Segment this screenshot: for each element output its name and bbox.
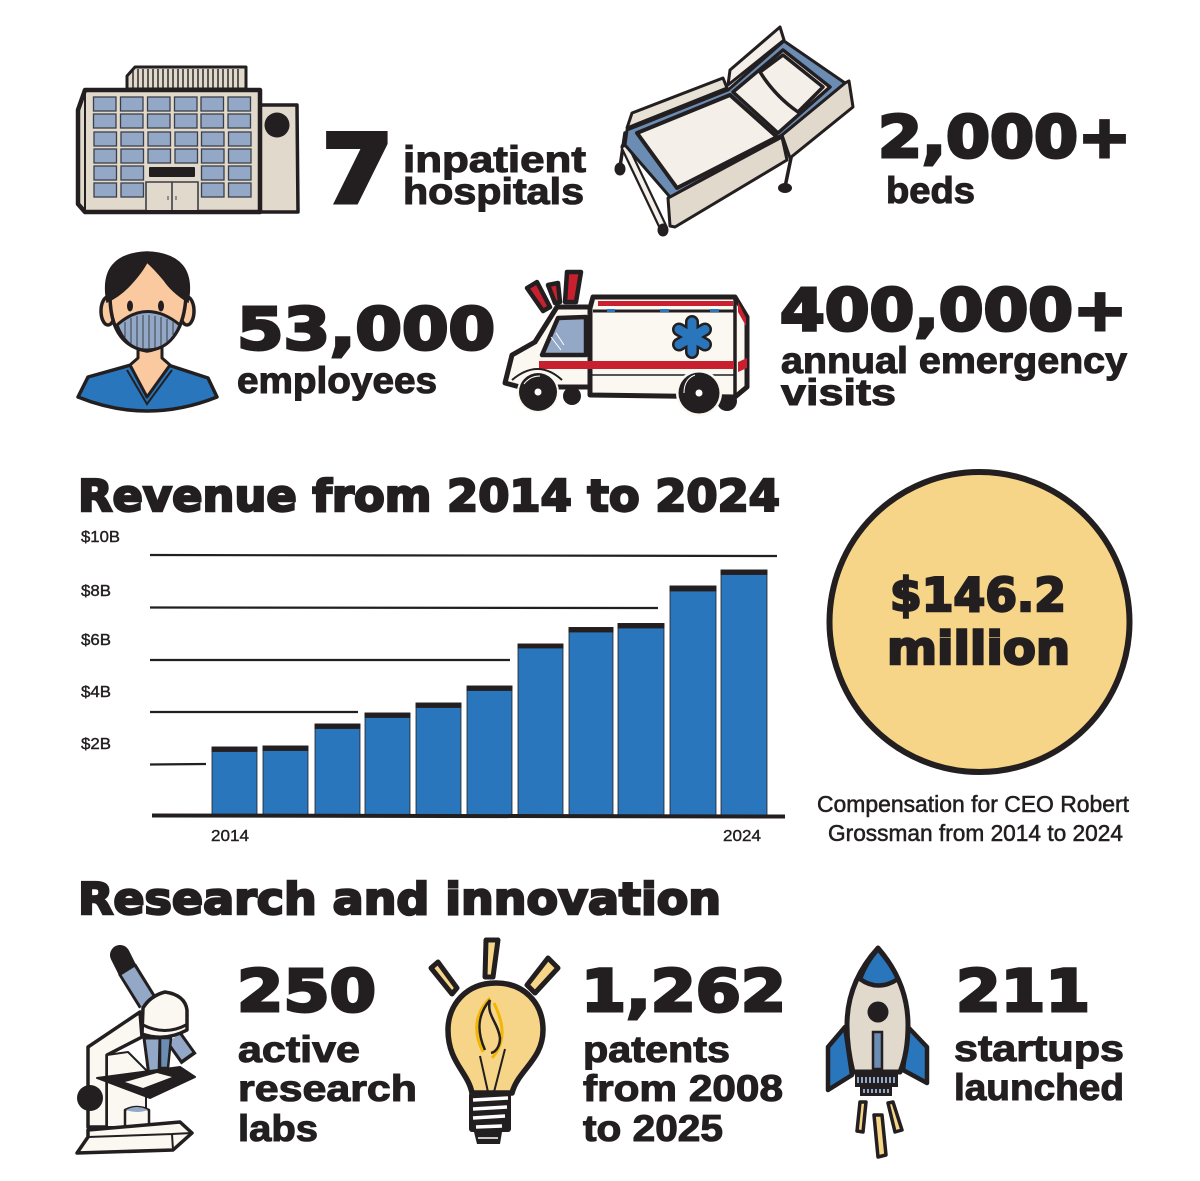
number: 250: 250 [237,957,376,1025]
label: beds: beds [886,170,975,211]
label: active research labs: research [238,1068,417,1109]
number: 7: 7 [322,116,393,225]
label: startups launched: startups [954,1028,1124,1069]
caption [817,791,1130,846]
bar chart: revenue 2014-2024 [81,529,785,845]
label: inpatient hospitals: inpatient [403,139,586,180]
number: 53,000: 53,000 [237,295,495,363]
icon: rocket [828,948,927,1157]
caption: Grossman from 2014 to 2024 [828,820,1123,846]
label: inpatient hospitals [403,139,586,212]
label: patents from 2008 to 2025: from 2008 [583,1068,783,1109]
panel: startups stat [828,948,1124,1157]
label: active research labs: active [238,1029,360,1070]
bars [212,570,767,815]
label: startups launched: launched [954,1067,1124,1108]
label: patents from 2008 to 2025: patents [583,1029,730,1070]
y-axis labels [81,529,120,753]
number: 1,262: 1,262 [581,957,786,1025]
panel: inpatient hospitals stat [78,67,586,225]
panel: patents stat [431,940,786,1149]
panel: CEO compensation [817,472,1130,846]
callout value [887,568,1070,675]
y-axis labels: $4B [81,684,111,701]
panel: research labs stat [77,955,417,1153]
y-axis labels: $8B [81,583,111,600]
icon: light bulb [431,940,558,1144]
label: employees: employees [237,360,437,401]
circle callout [830,472,1130,772]
label: active research labs [238,1029,417,1149]
icon: microscope [77,955,195,1153]
label: annual emergency visits: annual emergency [781,340,1127,381]
number: 400,000+: 400,000+ [780,276,1127,344]
panel: emergency visits stat [505,272,1127,416]
y-axis labels: $10B [81,529,120,546]
x-axis labels: 2024 [723,828,761,845]
caption: Compensation for CEO Robert [817,791,1130,817]
icon: masked healthcare worker [78,252,217,411]
callout value: $146.2 [890,568,1066,622]
x-axis labels [211,828,761,845]
number: 211: 211 [956,957,1090,1025]
label: active research labs: labs [238,1108,318,1149]
heading: revenue: Revenue from 2014 to 2024 [78,471,780,522]
label: startups launched [954,1028,1124,1108]
y-axis labels: $2B [81,736,111,753]
icon: ambulance [505,272,747,416]
label: annual emergency visits: visits [781,372,896,413]
label: inpatient hospitals: hospitals [403,171,584,212]
heading: research and innovation: Research and innovation [78,874,721,925]
y-axis labels: $6B [81,632,111,649]
label: patents from 2008 to 2025: to 2025 [583,1108,723,1149]
icon: hospital bed [614,27,853,236]
panel: employees stat [78,252,495,411]
label: annual emergency visits [781,340,1127,413]
x-axis labels: 2014 [211,828,249,845]
panel: beds stat [614,27,1131,236]
icon: hospital building [78,67,298,212]
label: patents from 2008 to 2025 [583,1029,783,1149]
number: 2,000+: 2,000+ [878,103,1131,171]
callout value: million [887,622,1070,675]
